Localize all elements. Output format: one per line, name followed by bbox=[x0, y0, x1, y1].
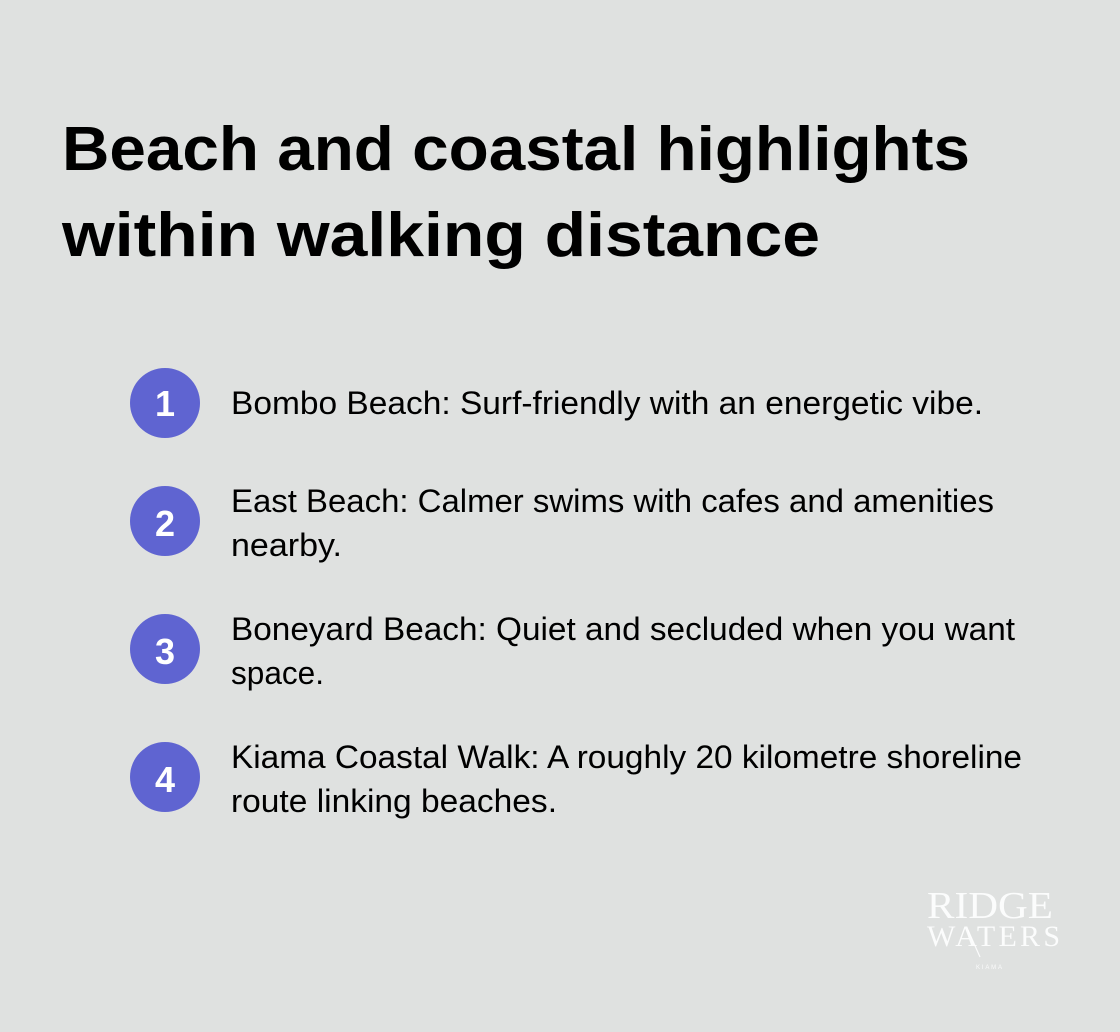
item 4 text bbox=[231, 739, 1022, 819]
item 4 text: Kiama Coastal Walk: A roughly 20 kilometre shoreline bbox=[231, 739, 1022, 775]
number badge 3: 3 bbox=[155, 631, 175, 672]
number badge 2 bbox=[130, 486, 200, 556]
logo: Ridge Waters Kiama: WATERS bbox=[927, 920, 1060, 953]
number badge 1 bbox=[130, 368, 200, 438]
number badge 2: 2 bbox=[155, 503, 175, 544]
logo: Ridge Waters Kiama: KIAMA bbox=[976, 965, 1002, 971]
item 3 text bbox=[231, 611, 1015, 691]
item 1 text: Bombo Beach: Surf-friendly with an energetic vibe. bbox=[231, 385, 983, 421]
item 2 text: nearby. bbox=[231, 527, 342, 563]
item 2 text bbox=[231, 483, 994, 563]
item 2 text: East Beach: Calmer swims with cafes and amenities bbox=[231, 483, 994, 519]
number badge 1: 1 bbox=[155, 383, 175, 424]
list item 2: East Beach bbox=[130, 483, 994, 563]
item 3 text: Boneyard Beach: Quiet and secluded when you want bbox=[231, 611, 1015, 647]
list item 1: Bombo Beach bbox=[130, 368, 983, 438]
number badge 3 bbox=[130, 614, 200, 684]
item 4 text: route linking beaches. bbox=[231, 783, 557, 819]
number badge 4: 4 bbox=[155, 759, 175, 800]
list item 3: Boneyard Beach bbox=[130, 611, 1015, 691]
item 3 text: space. bbox=[231, 655, 324, 691]
number badge 4 bbox=[130, 742, 200, 812]
title bbox=[61, 115, 970, 270]
title: within walking distance bbox=[61, 201, 820, 270]
logo: Ridge Waters Kiama bbox=[927, 885, 1060, 971]
logo: Ridge Waters Kiama: RIDGE bbox=[927, 885, 1053, 927]
title: Beach and coastal highlights bbox=[62, 115, 970, 184]
list item 4: Kiama Coastal Walk bbox=[130, 739, 1022, 819]
